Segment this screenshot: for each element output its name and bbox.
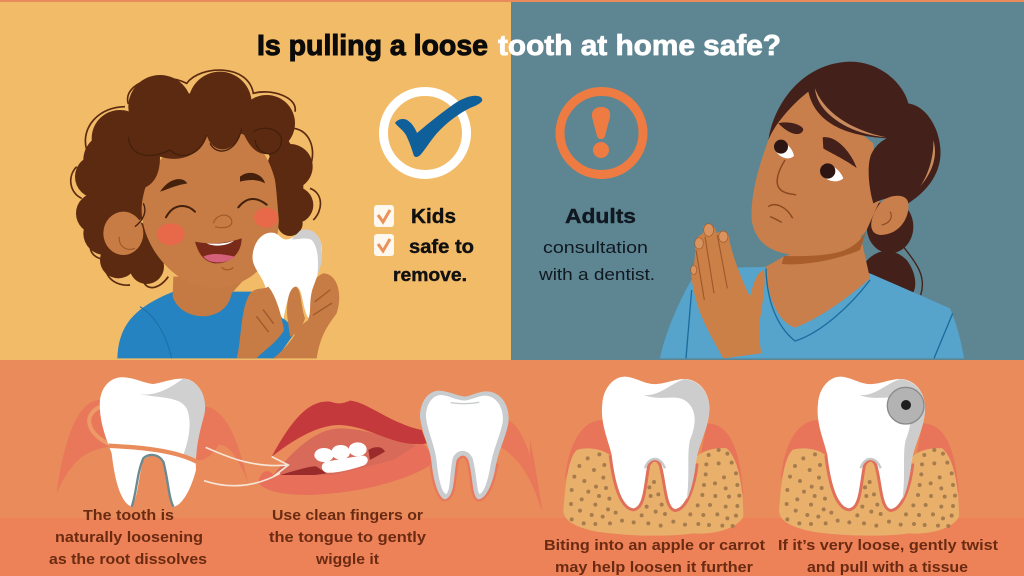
adults text: consultation [543, 238, 648, 257]
kids text: Kids [411, 206, 456, 228]
kids checklist [374, 205, 474, 285]
caption: step 1 [49, 507, 207, 568]
child neck [173, 277, 247, 316]
caption: step 2: the tongue to gently [269, 529, 427, 546]
caption: step 2: Use clean fingers or [272, 507, 423, 524]
child hair outline curls [71, 70, 320, 288]
checkbox: safe to [374, 234, 394, 256]
title: tooth at home safe? [498, 30, 781, 62]
child back hair [75, 72, 313, 284]
checkbox: kids [374, 205, 394, 227]
adult hair highlights [815, 88, 935, 187]
child left hand [237, 287, 284, 358]
adult hair [768, 62, 941, 203]
icon: tissue dot on tooth [887, 387, 924, 424]
adult eyes [774, 140, 843, 181]
caption: step 1: naturally loosening [55, 529, 203, 546]
step 3 and step 4 illustrations [530, 377, 959, 536]
child closed eyes [166, 199, 267, 217]
child cheeks [157, 208, 278, 245]
icon: check mark in white circle [384, 92, 482, 174]
caption: step 3: Biting into an apple or carrot [544, 537, 765, 554]
second tooth [420, 391, 509, 499]
left wing gum remnant [530, 438, 543, 512]
caption: step 3: may help loosen it further [555, 559, 753, 576]
second tooth gum wing [500, 420, 542, 510]
kids text: safe to [409, 237, 474, 258]
tooth held by child [253, 230, 322, 319]
title: Is pulling a loose [257, 30, 488, 62]
icon: exclamation in orange circle [560, 92, 643, 174]
child nose and ear lines [119, 215, 233, 270]
adults text: Adults [565, 206, 636, 228]
child eyebrows [160, 173, 265, 192]
caption: step 2: wiggle it [315, 551, 379, 568]
child mouth [195, 238, 242, 263]
adults text: with a dentist. [538, 265, 655, 284]
title [257, 30, 781, 62]
caption: step 4: and pull with a tissue [807, 559, 968, 576]
caption: step 1: as the root dissolves [49, 551, 207, 568]
adult nose and mouth [768, 160, 796, 222]
third tooth [602, 377, 709, 509]
child ear [103, 212, 143, 255]
adult neck shadow [782, 232, 866, 264]
gum ring [89, 407, 112, 445]
caption: step 4: If it’s very loose, gently twist [778, 537, 998, 554]
adult neck [766, 233, 870, 328]
adult shirt [660, 267, 964, 358]
adults text [538, 206, 655, 284]
child shirt [117, 292, 297, 358]
kids text [393, 206, 474, 285]
illustration: smiling child holding tooth [71, 70, 339, 358]
panel: adults background [511, 2, 1024, 360]
panel: steps lower band [0, 518, 1024, 576]
child face [142, 131, 279, 288]
kids text: remove. [393, 265, 467, 285]
adult collar lines [686, 268, 953, 358]
caption: step 3 [544, 537, 765, 576]
caption: step 1: The tooth is [83, 507, 174, 524]
gum behind first tooth [57, 400, 248, 493]
child thumb [287, 287, 305, 337]
first tooth [100, 377, 205, 507]
adult eyebrows [778, 122, 857, 168]
arrow: tooth to mouth [204, 447, 288, 486]
gum and bone step 4 [779, 377, 959, 536]
adult face [751, 92, 880, 255]
child right hand [273, 273, 339, 358]
panel: kids background [0, 2, 511, 360]
adult back hair [860, 200, 915, 292]
step 1 and step 2 illustrations [57, 377, 542, 510]
adult ear [871, 196, 909, 235]
caption: step 4 [778, 537, 998, 576]
gum and bone step 3 [563, 420, 743, 536]
illustration: worried adult with hands together [660, 62, 964, 358]
mouth illustration [258, 401, 437, 495]
adult praying hand [691, 224, 765, 358]
fourth tooth [818, 377, 925, 509]
child fringe [117, 93, 303, 230]
caption: step 2 [269, 507, 427, 568]
